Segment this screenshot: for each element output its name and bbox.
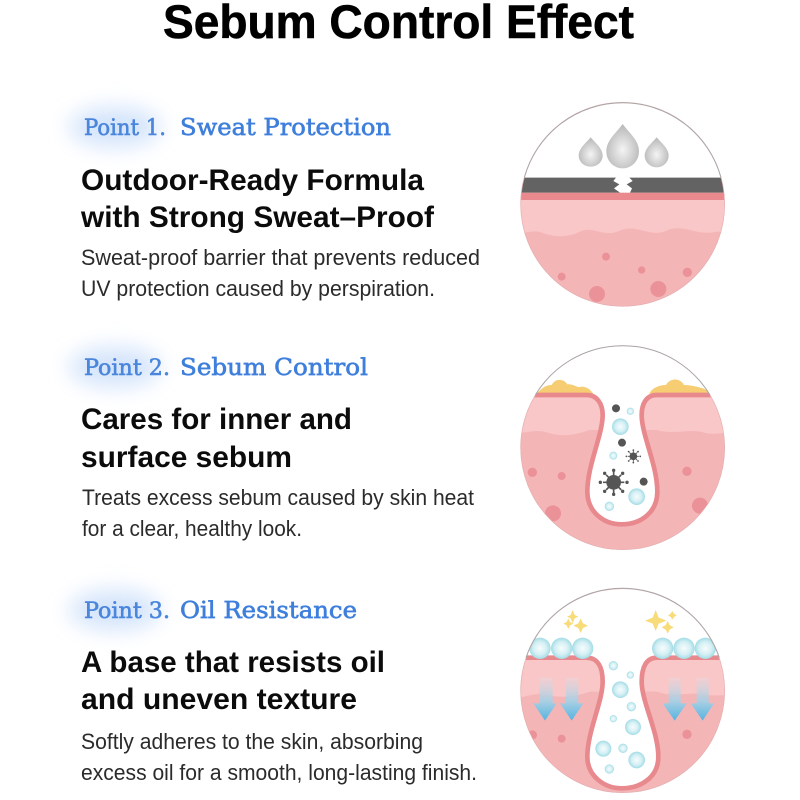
body text: point 2: for a clear, healthy look. <box>82 516 302 541</box>
body text: point 2: Treats excess sebum caused by skin heat <box>82 485 474 510</box>
body text: point 1 <box>81 245 480 301</box>
sebum deposits <box>537 379 713 394</box>
skin dots <box>528 730 692 743</box>
highlight glow: point 3 <box>69 590 161 630</box>
subheading: sebum control: Sebum Control <box>180 353 368 381</box>
panel: point 2 text <box>69 347 474 541</box>
skin surface line <box>521 192 724 200</box>
heading: cares for inner and surface sebum <box>81 403 352 474</box>
subheading: sweat protection: Sweat Protection <box>180 113 391 141</box>
pore <box>590 395 655 522</box>
subheading: oil resistance: Oil Resistance <box>180 596 357 624</box>
body text: point 3 <box>81 729 477 785</box>
heading: a base that resists oil: A base that resists oil <box>81 646 385 679</box>
heading: a base that resists oil <box>81 646 385 716</box>
label: point 1: Point 1. <box>84 116 166 141</box>
surface bubbles <box>529 638 716 659</box>
skin lower layer <box>521 430 724 550</box>
skin upper layer <box>521 200 724 236</box>
sparkles <box>563 610 677 634</box>
dark particles <box>612 404 648 486</box>
heading: a base that resists oil: and uneven texture <box>81 683 357 716</box>
diagram: pore with sebum and bacteria <box>520 345 725 550</box>
bubbles <box>605 408 645 511</box>
heading: cares for inner and surface sebum: surface sebum <box>81 441 292 474</box>
diagram: sweat-proof skin barrier <box>520 102 725 307</box>
icon: bacteria large <box>599 469 629 496</box>
skin lower layer <box>522 692 724 792</box>
highlight glow: point 1 <box>69 107 161 147</box>
icon: sweat drops <box>579 124 669 168</box>
body text: point 2 <box>82 485 474 541</box>
barrier film with crack <box>522 178 724 193</box>
skin dots <box>558 253 692 302</box>
panel: point 3 text <box>69 590 477 785</box>
heading: outdoor-ready formula: with Strong Sweat–Proof <box>80 201 435 234</box>
skin dots <box>528 467 708 521</box>
body text: point 3: Softly adheres to the skin, absorbing <box>81 729 423 754</box>
heading: outdoor-ready formula: Outdoor-Ready Formula <box>81 164 424 197</box>
pore bubbles <box>595 661 645 774</box>
skin upper layer <box>522 397 724 436</box>
panel: point 1 text <box>69 107 480 301</box>
skin lower layer <box>525 228 720 306</box>
heading: cares for inner and surface sebum: Cares for inner and <box>81 403 352 436</box>
arrows pointing down <box>533 678 714 721</box>
heading: outdoor-ready formula <box>80 164 435 234</box>
body text: point 3: excess oil for a smooth, long-lasting finish. <box>81 760 477 785</box>
skin upper layer <box>521 660 724 698</box>
icon: bacteria small <box>626 449 641 463</box>
diagram: oil resistance base <box>520 588 725 793</box>
label: point 3: Point 3. <box>84 599 170 624</box>
pore <box>590 658 656 786</box>
label: point 2: Point 2. <box>84 356 170 381</box>
body text: point 1: Sweat-proof barrier that prevents reduced <box>81 245 480 270</box>
highlight glow: point 2 <box>69 347 161 387</box>
body text: point 1: UV protection caused by perspiration. <box>81 276 435 301</box>
